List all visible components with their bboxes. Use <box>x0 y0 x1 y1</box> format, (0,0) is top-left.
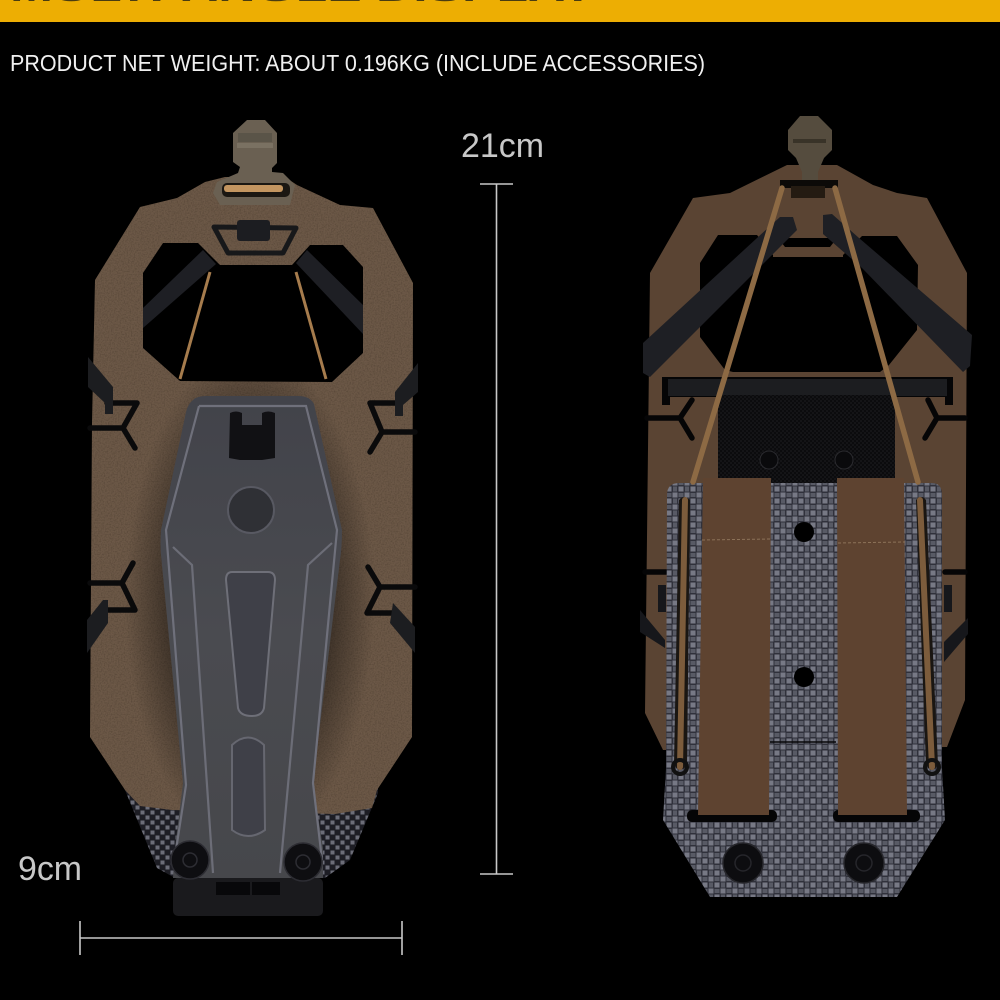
brown panel, back <box>645 165 967 750</box>
carbon plate, back <box>663 483 945 897</box>
width dimension line <box>80 921 402 955</box>
panel window, back <box>700 235 918 372</box>
plate screws <box>723 843 884 883</box>
plate holes <box>794 522 814 687</box>
elastic straps in window, front <box>143 250 363 334</box>
brown panel, front <box>90 177 413 814</box>
MOLLE clip, back <box>780 116 838 188</box>
header banner <box>0 0 1000 22</box>
MOLLE clip, front <box>213 120 295 205</box>
grey holster plate <box>160 396 342 878</box>
latch <box>229 412 275 460</box>
rear slot and strap <box>662 377 953 405</box>
belt slots <box>687 810 920 822</box>
cord eyelets <box>673 760 939 774</box>
button <box>228 487 274 533</box>
brown elastic cords <box>680 188 932 767</box>
height dimension line <box>480 184 513 874</box>
plate seam <box>770 741 836 743</box>
cord slots in plate <box>674 497 938 770</box>
back view of holster panel <box>640 116 972 897</box>
side straps, front <box>87 357 418 653</box>
velcro panel <box>718 395 895 485</box>
panel window, front <box>143 243 363 382</box>
hinge at bottom of holster <box>173 878 323 916</box>
carbon base, front <box>125 780 378 878</box>
strap stitching <box>702 539 905 543</box>
height label: 21cm <box>461 127 544 165</box>
side T slots, front <box>90 403 415 613</box>
product weight text: PRODUCT NET WEIGHT: ABOUT 0.196KG (INCLUDE ACCESSORIES) <box>10 50 705 76</box>
lower recess <box>232 738 265 836</box>
T bracket, back <box>773 186 845 257</box>
T slots, back <box>645 400 965 572</box>
velcro screws <box>760 451 853 469</box>
shadow around holster <box>125 350 375 850</box>
front view of holster panel <box>87 120 418 916</box>
front screws <box>171 841 322 881</box>
elastic straps, back <box>643 214 972 377</box>
upper recess <box>226 572 275 716</box>
side straps, back <box>640 585 968 662</box>
clip slot, front <box>214 220 296 253</box>
belt straps <box>698 478 907 815</box>
width label: 9cm <box>18 850 82 888</box>
brown cords in window, front <box>180 272 326 379</box>
